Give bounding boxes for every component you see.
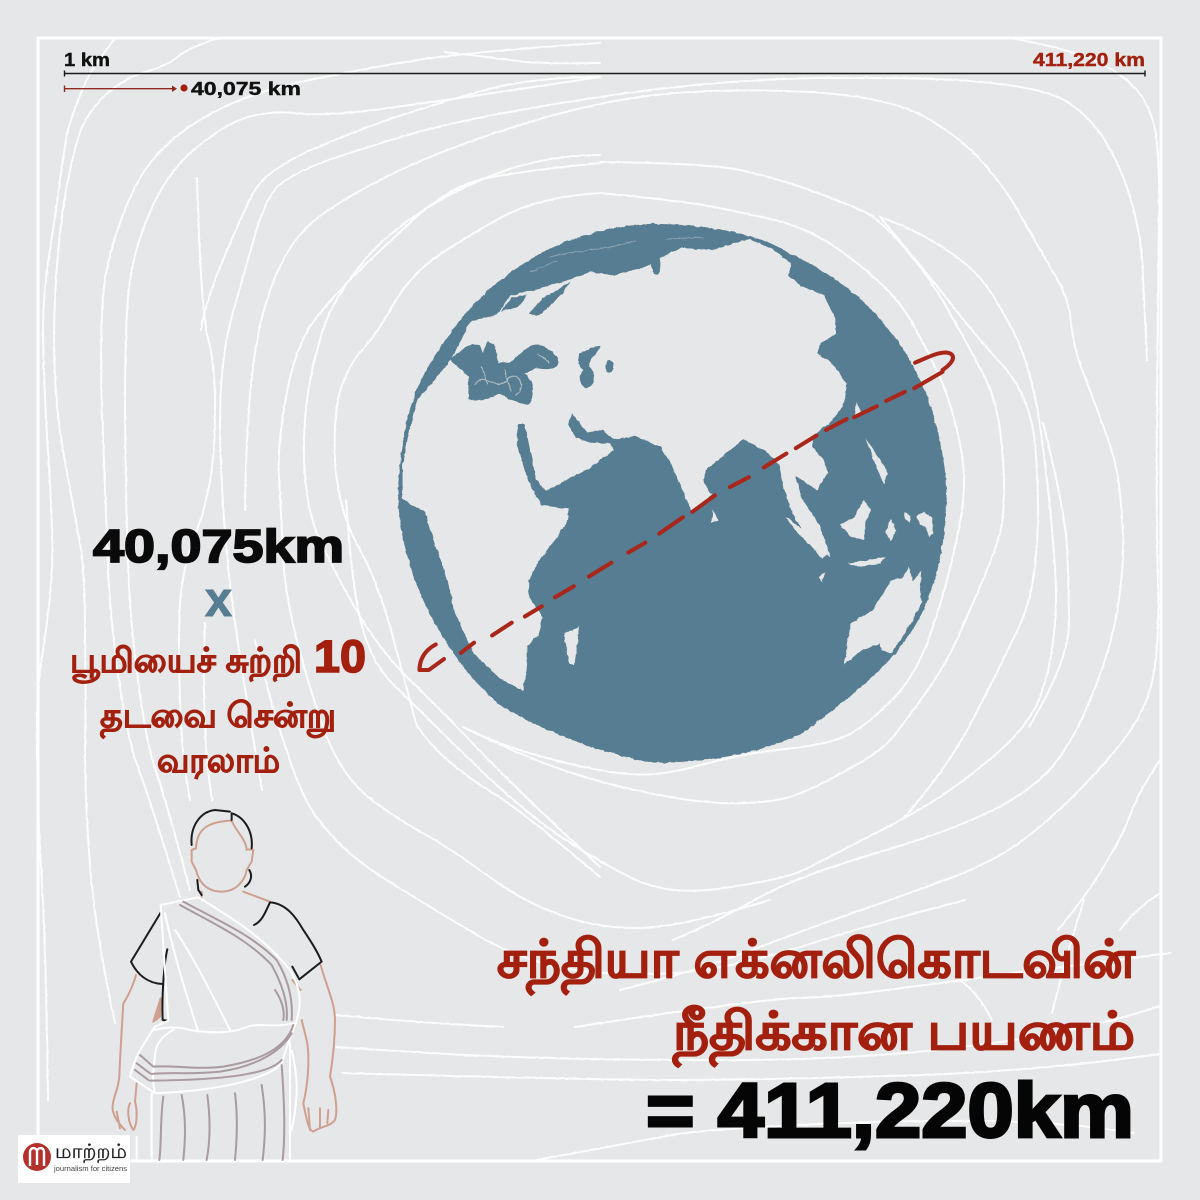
scale end label: 411,220 km xyxy=(1033,50,1145,70)
multiply sign: x xyxy=(205,573,232,627)
logo background xyxy=(18,1135,130,1183)
headline line 1: சந்தியா எக்னலிகொடவின் xyxy=(497,931,1136,996)
logo wordmark: மாற்றம் xyxy=(55,1141,127,1163)
caption line 2: தடவை சென்று xyxy=(100,697,336,739)
headline line 2: நீதிக்கான பயணம் xyxy=(672,1003,1135,1068)
hair and blouse outline xyxy=(131,810,322,1021)
caption line 3: வரலாம் xyxy=(157,742,280,780)
circumference figure: 40,075km xyxy=(93,520,344,572)
main conclusion block xyxy=(497,931,1136,1154)
saree outline xyxy=(130,897,300,1160)
globe illustration xyxy=(398,224,953,763)
person illustration xyxy=(113,810,336,1160)
globe sphere and land xyxy=(398,224,947,763)
left calculation block xyxy=(70,520,366,780)
logo tagline: journalism for citizens xyxy=(53,1164,127,1173)
logo xyxy=(18,1135,130,1183)
scale bar xyxy=(64,70,1145,76)
logo mark xyxy=(23,1143,51,1171)
number ten: 10 xyxy=(314,631,366,682)
saree stripes xyxy=(135,902,293,1160)
dashed red orbit xyxy=(420,353,953,670)
skin outline xyxy=(113,821,336,1132)
caption line 1: பூமியைச் சுற்றி xyxy=(70,642,302,684)
scale start label: 1 km xyxy=(64,50,110,70)
red earth circumference arrow xyxy=(64,84,188,92)
ten times caption xyxy=(70,631,366,780)
distance scale xyxy=(64,50,1145,99)
circumference label: 40,075 km xyxy=(191,79,301,99)
total distance: = 411,220km xyxy=(646,1068,1134,1154)
